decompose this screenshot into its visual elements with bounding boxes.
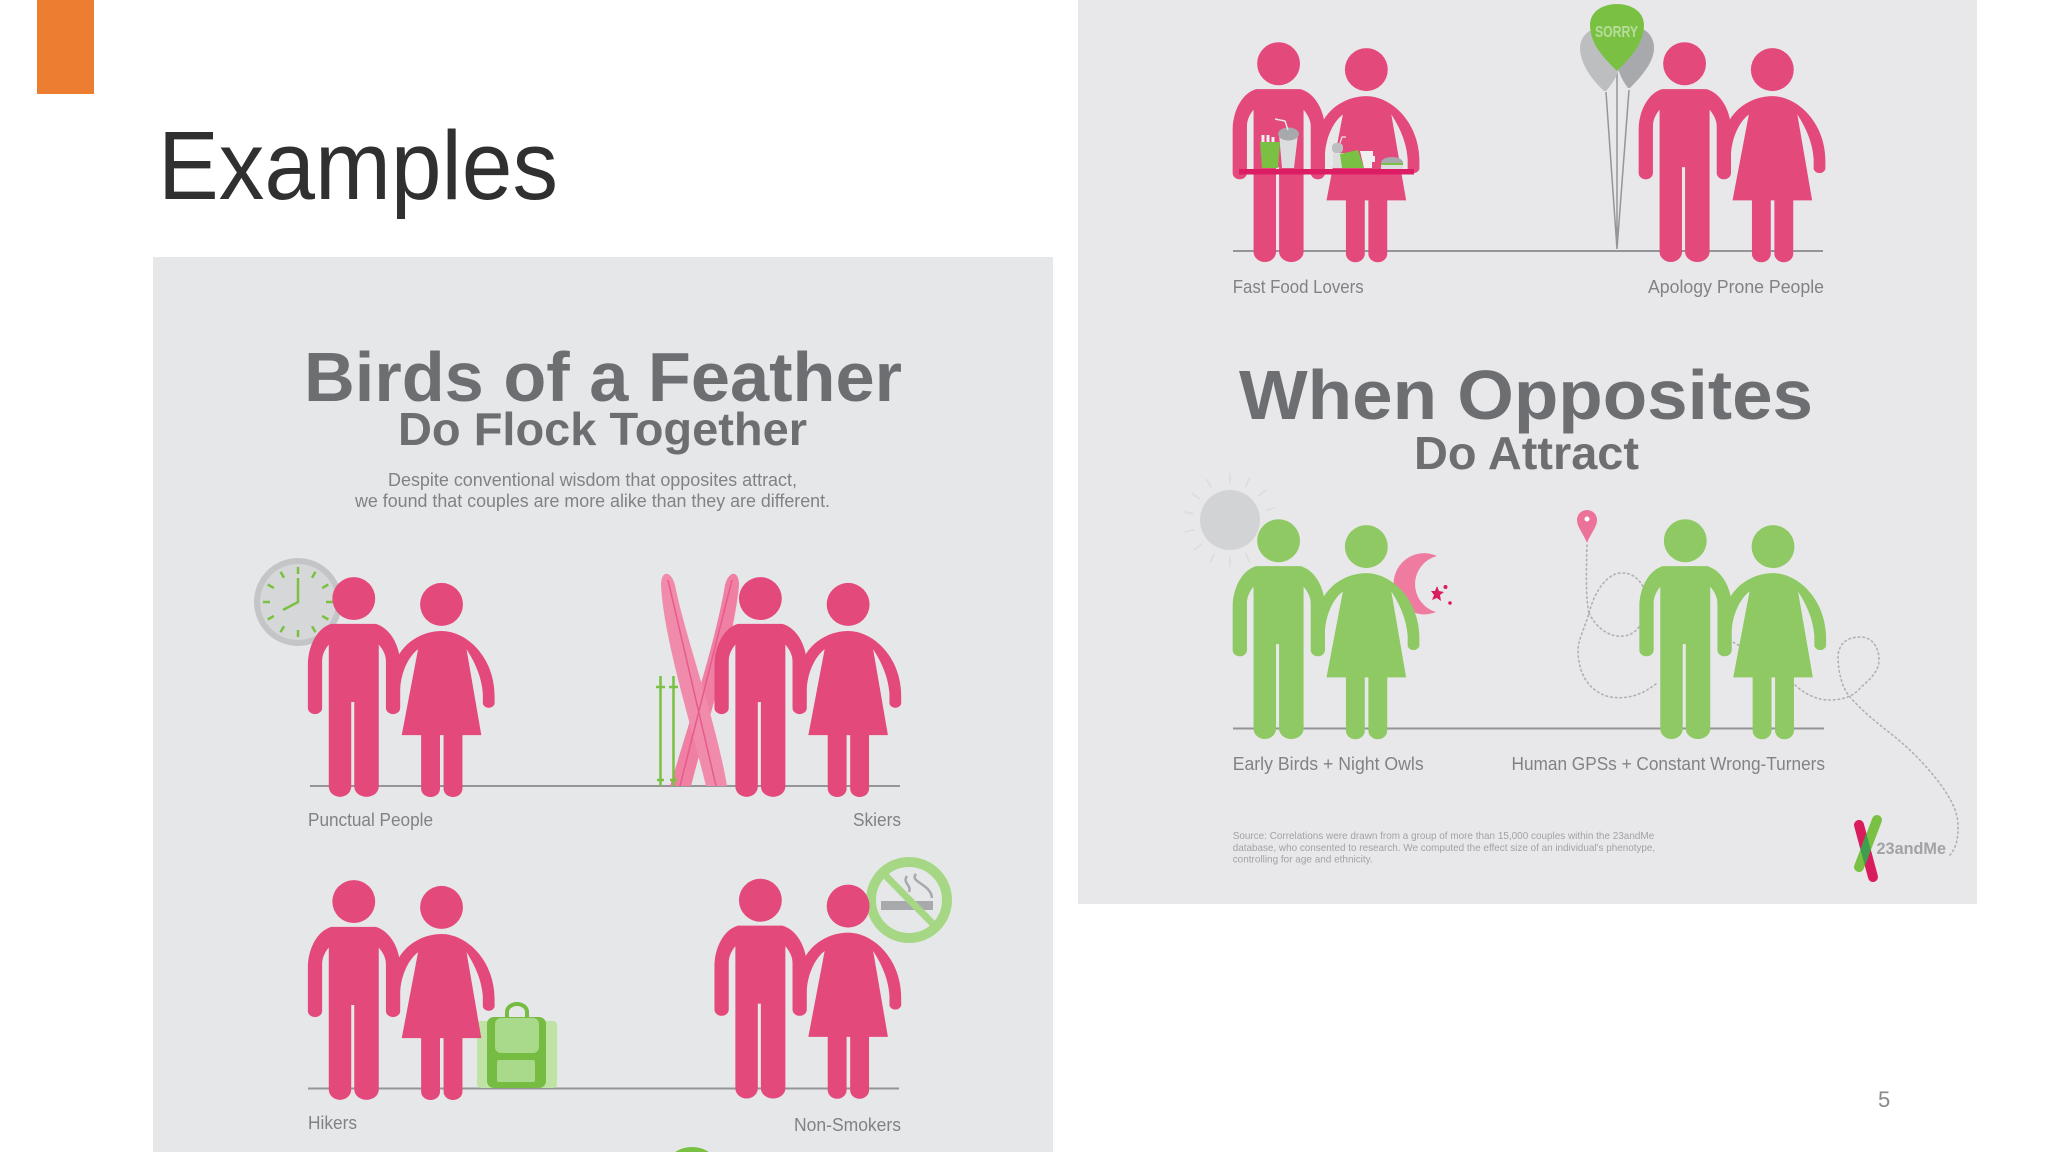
- label: Human GPSs + Constant Wrong-Turners: Human GPSs + Constant Wrong-Turners: [1512, 754, 1825, 774]
- ground line: bottom row: [1233, 728, 1824, 730]
- couple: fast food lovers: [1233, 42, 1419, 262]
- icon: backpack: [477, 1004, 557, 1088]
- icon: crescent moon and stars: [1394, 553, 1452, 614]
- label: Punctual People: Punctual People: [308, 810, 433, 830]
- orange accent block: [37, 0, 94, 94]
- couple: early birds and night owls: [1233, 519, 1419, 739]
- source note: [1233, 830, 1655, 866]
- label: Apology Prone People: Apology Prone People: [1648, 277, 1824, 297]
- icon: no smoking: [871, 862, 947, 938]
- subheading: Do Flock Together: Do Flock Together: [398, 403, 807, 455]
- label: Early Birds + Night Owls: Early Birds + Night Owls: [1233, 754, 1424, 774]
- ground line: top row: [1233, 250, 1823, 252]
- intro text: Despite conventional wisdom that opposites attract,: [388, 470, 797, 490]
- couple: human GPSs and wrong-turners: [1639, 519, 1826, 739]
- logo: 23andMe: 23andMe: [1876, 839, 1946, 858]
- couple: punctual people: [308, 577, 495, 797]
- source note: Source: Correlations were drawn from a group of more than 15,000 couples within the 23andMe: [1233, 830, 1654, 842]
- ground line: row 1: [310, 785, 900, 787]
- icon: sorry balloons: [1580, 4, 1654, 249]
- dotted wandering route: [1578, 545, 1958, 855]
- label: Skiers: Skiers: [853, 810, 901, 830]
- intro text: we found that couples are more alike than they are different.: [354, 491, 830, 511]
- ground line: row 2: [308, 1088, 899, 1090]
- label: Fast Food Lovers: Fast Food Lovers: [1233, 277, 1364, 297]
- cropped green icon at bottom edge: [671, 1147, 713, 1152]
- balloon text: SORRY: [1595, 24, 1638, 41]
- label: Hikers: Hikers: [308, 1113, 357, 1133]
- panel: When Opposites Do Attract: [1078, 0, 1977, 904]
- icon: sun: [1184, 473, 1275, 567]
- subheading: Do Attract: Do Attract: [1414, 427, 1639, 479]
- intro text: [354, 470, 830, 511]
- icon: fast food tray: [1239, 119, 1414, 174]
- couple: apology prone people: [1639, 42, 1825, 262]
- icon: map pin: [1577, 510, 1597, 543]
- couple: skiers: [714, 577, 901, 797]
- slide title: Examples: [158, 111, 558, 220]
- icon: clock: [254, 558, 342, 646]
- page number: 5: [1878, 1087, 1890, 1112]
- icon: skis and poles: [656, 574, 739, 786]
- heading: Birds of a Feather: Birds of a Feather: [304, 338, 902, 416]
- label: Non-Smokers: Non-Smokers: [794, 1115, 901, 1135]
- source note: controlling for age and ethnicity.: [1233, 854, 1373, 866]
- heading: When Opposites: When Opposites: [1239, 356, 1813, 434]
- couple: non-smokers: [714, 879, 901, 1099]
- panel: Birds of a Feather: [153, 257, 1053, 1152]
- source note: database, who consented to research. We computed the effect size of an individual's phenotype,: [1233, 842, 1655, 854]
- logo: 23andMe: [1859, 820, 1946, 877]
- couple: hikers: [308, 880, 495, 1100]
